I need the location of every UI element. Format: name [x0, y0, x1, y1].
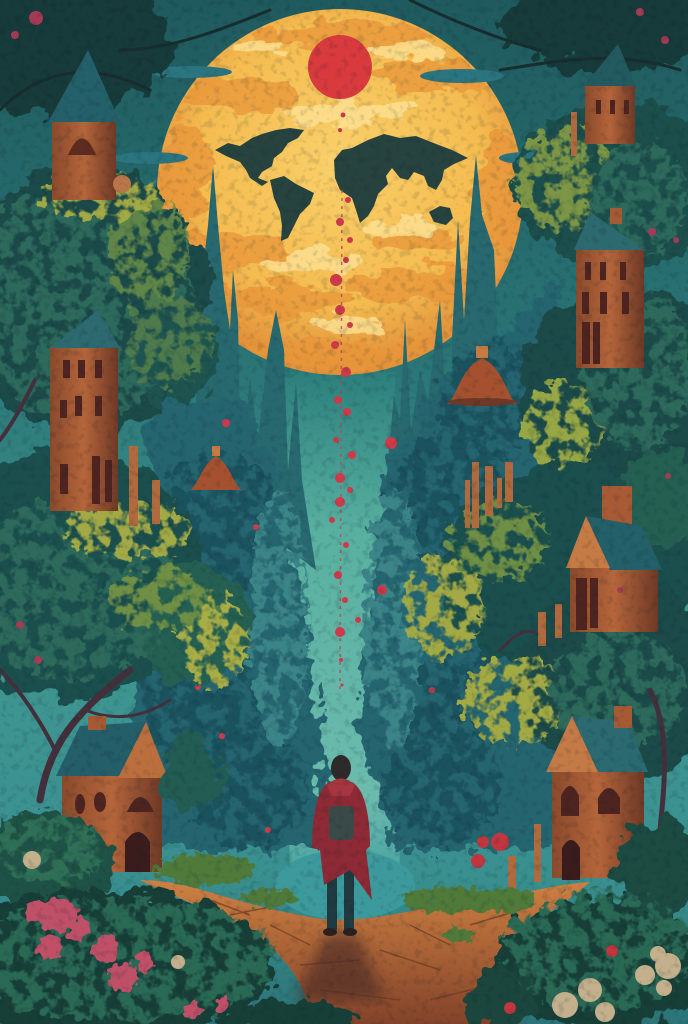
- mid forest right: [385, 155, 498, 500]
- dripping red dots: [195, 112, 435, 874]
- south america: [270, 176, 314, 241]
- figure shadow: [295, 935, 385, 1000]
- north america: [215, 128, 304, 186]
- red streak: [340, 190, 342, 690]
- house bottom right: [546, 706, 648, 880]
- bell right: [447, 346, 517, 406]
- house right: [566, 486, 662, 632]
- pillars right: [465, 112, 577, 890]
- tree foliage mid right: [405, 450, 688, 775]
- moon: [155, 9, 524, 375]
- tower mid left: [50, 310, 120, 511]
- central light gap: [285, 372, 400, 900]
- red roses: [471, 833, 618, 1014]
- world map: [215, 128, 468, 241]
- tree foliage top left: [0, 0, 218, 435]
- tower top right: [584, 44, 636, 144]
- tower top left: [48, 50, 131, 200]
- bell left: [190, 446, 242, 490]
- mid forest texture: [130, 340, 540, 850]
- stone path: [140, 880, 590, 1024]
- foreground foliage right: [465, 820, 688, 1024]
- foreground foliage left: [0, 730, 360, 1024]
- house bottom left: [56, 716, 168, 872]
- mid forest mass: [130, 280, 560, 850]
- pink flowers: [27, 898, 229, 1018]
- traveller figure: [312, 755, 372, 936]
- path stones: [210, 900, 520, 1000]
- pond: [275, 850, 415, 920]
- clouds: [112, 66, 551, 164]
- australia: [429, 206, 453, 225]
- pillars left: [129, 446, 160, 526]
- tower right: [574, 208, 645, 368]
- small tree blossoms: [11, 8, 679, 664]
- mid forest lighter texture: [250, 490, 425, 750]
- undergrowth near path: [155, 854, 535, 942]
- red sun: [308, 35, 372, 99]
- tree foliage top right: [500, 0, 688, 505]
- tree foliage mid left: [0, 450, 251, 700]
- cream flowers: [23, 851, 681, 1022]
- eurasia and africa: [334, 134, 468, 223]
- mid forest left: [196, 165, 316, 570]
